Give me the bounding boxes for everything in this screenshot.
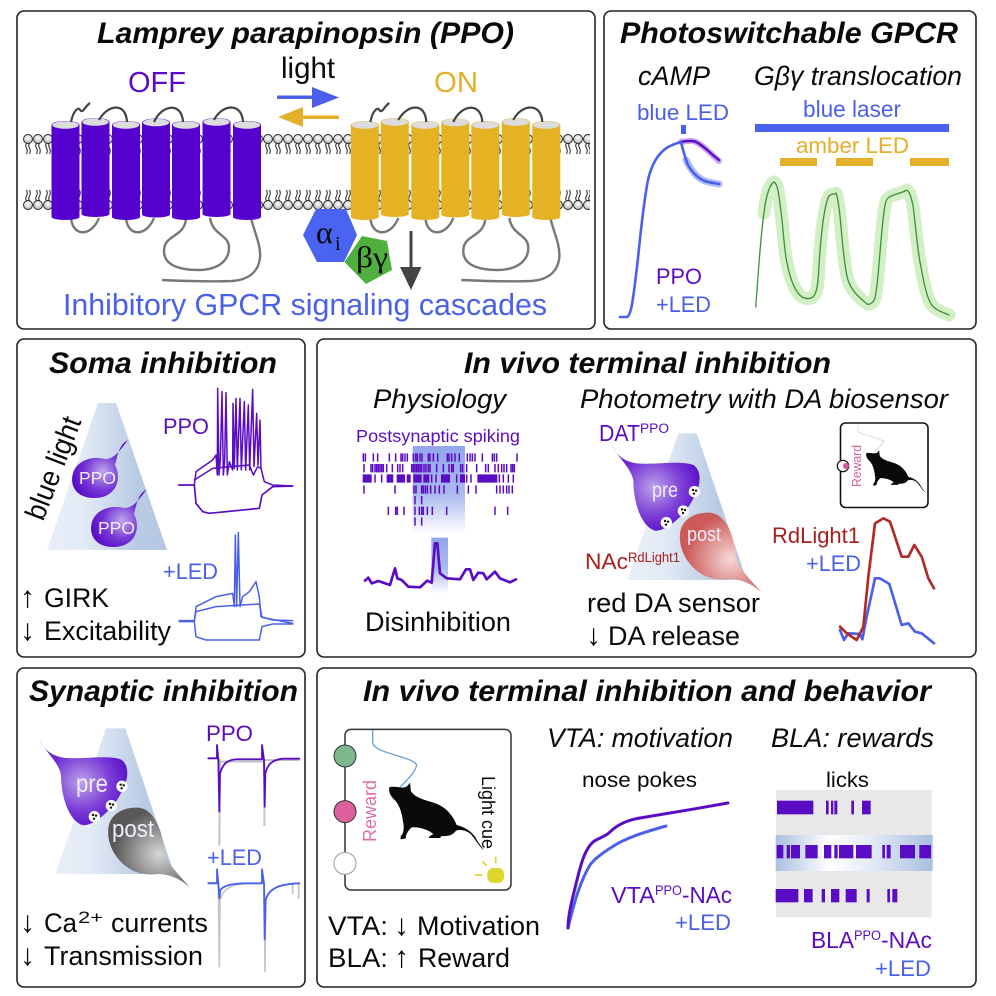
label: blue laser: blue laser: [803, 96, 901, 122]
label: VTA PPO-NAc: PPO: [655, 883, 682, 898]
label: +LED nose pokes: +LED: [675, 910, 731, 935]
neuron: PPO upper: [72, 440, 128, 498]
label: NAc RdLight1: RdLight1: [628, 550, 680, 565]
diagram: synapse: [39, 728, 190, 888]
text: down Excitability: ↓: [20, 614, 35, 647]
line chart: photometry: [840, 518, 934, 643]
stimulus bar: blue laser: [755, 124, 949, 132]
heading: Synaptic inhibition: Synaptic inhibition: [29, 675, 298, 708]
icon: mouse in behaviour box: Reward: [850, 445, 864, 487]
text: down DA release: ↓: [586, 619, 601, 652]
label: blue light: blue light: [20, 412, 88, 525]
subheading: VTA motivation: VTA: motivation: [547, 723, 733, 753]
label: DAT PPO: PPO: [640, 421, 669, 436]
text: VTA down Motivation: ↓: [394, 909, 409, 942]
label: +LED licks: +LED: [875, 956, 931, 981]
neuron: PPO upper: PPO: [79, 468, 116, 488]
label: OFF state: OFF: [128, 67, 186, 99]
arrow: blue forward: [277, 87, 339, 108]
text: down Ca2+ currents: currents: [111, 908, 208, 938]
label: light: light: [281, 52, 335, 85]
text: BLA up Reward: Reward: [418, 943, 510, 973]
label: licks: licks: [826, 769, 869, 792]
icon: G alpha i subunit: i: [335, 233, 341, 255]
text: up GIRK: GIRK: [44, 583, 109, 613]
diagram: behaviour box: Reward: [360, 780, 380, 842]
line chart: G beta gamma translocation: [756, 182, 949, 315]
label: NAc RdLight1: NAc: [585, 549, 628, 574]
text: down Excitability: Excitability: [44, 616, 171, 646]
subheading: Photometry with DA biosensor: Photometry with DA biosensor: [580, 384, 949, 414]
membrane lipid bilayer: [23, 133, 590, 212]
arrow: signaling down: [400, 231, 422, 290]
diagram: DA synapse: [612, 433, 762, 593]
stimulus bar: blue LED: [681, 125, 686, 134]
arrow: amber reverse: [278, 107, 339, 127]
heading: In vivo terminal inhibition and behavior: In vivo terminal inhibition and behavior: [363, 675, 933, 708]
stimulus bars: amber LED: [780, 158, 949, 166]
label: +LED photometry: +LED: [806, 551, 861, 576]
label: BLA PPO-NAc: -NAc: [881, 927, 932, 953]
current traces: +LED: [208, 869, 299, 972]
label: pre: pre: [76, 770, 108, 798]
diagram: behaviour box: [334, 729, 511, 890]
caption: inhibitory cascades: Inhibitory GPCR signaling cascades: [63, 289, 547, 322]
text: BLA up Reward: ↑: [394, 941, 409, 974]
label: nose pokes: nose pokes: [582, 769, 697, 792]
label: ON state: ON: [434, 67, 478, 99]
panel: Lamprey parapinopsin: [17, 11, 595, 329]
label: +LED: +LED: [656, 292, 711, 317]
icon: mouse in behaviour box: [837, 423, 928, 508]
label: BLA PPO-NAc: BLA: [811, 927, 855, 953]
text: down Transmission: Transmission: [44, 941, 203, 971]
label: post: post: [687, 524, 721, 546]
receptor: PPO ON state: [351, 103, 560, 281]
text: down Ca2+ currents: ↓: [20, 906, 35, 939]
line chart: cAMP: [620, 141, 719, 317]
label: Disinhibition: Disinhibition: [365, 607, 511, 637]
label: PPO: PPO: [656, 264, 702, 289]
subheading: cAMP: cAMP: [638, 61, 710, 91]
light cone: [47, 403, 167, 550]
icon: G alpha i subunit: α: [316, 214, 333, 250]
icon: G beta gamma subunit: [344, 236, 392, 284]
label: post: post: [112, 816, 154, 843]
text: down Ca2+ currents: 2+: [78, 908, 103, 927]
text: down DA release: DA release: [608, 621, 740, 651]
label: RdLight1: RdLight1: [772, 523, 860, 548]
heading: Lamprey parapinopsin (PPO): Lamprey parapinopsin (PPO): [97, 17, 514, 50]
raster plot: licks: [776, 790, 933, 917]
label: PPO traces: PPO: [206, 721, 253, 746]
label: PPO trace: PPO: [163, 414, 209, 439]
panel: In vivo terminal inhibition: [317, 339, 976, 657]
label: amber LED: amber LED: [796, 133, 909, 158]
text: red DA sensor: red DA sensor: [587, 588, 760, 618]
label: DAT PPO: DAT: [599, 420, 640, 446]
label: VTA PPO-NAc: VTA: [611, 882, 656, 908]
icon: G beta gamma subunit: βγ: [356, 241, 388, 274]
panel: Synaptic inhibition: [17, 668, 305, 987]
label: +LED traces: +LED: [207, 845, 262, 870]
panel: Soma inhibition: [17, 339, 305, 657]
line chart: nose pokes: [568, 803, 728, 928]
panel: Photoswitchable GPCR: [604, 11, 976, 329]
text: BLA up Reward: BLA:: [328, 943, 388, 973]
label: Postsynaptic spiking: Postsynaptic spiking: [356, 426, 520, 446]
heading: Soma inhibition: Soma inhibition: [49, 347, 277, 380]
label: +LED trace: +LED: [163, 559, 218, 584]
diagram: behaviour box: Light cue: [478, 776, 498, 849]
text: down Transmission: ↓: [20, 939, 35, 972]
subheading: Physiology: Physiology: [373, 384, 508, 414]
heading: In vivo terminal inhibition: In vivo terminal inhibition: [464, 347, 831, 380]
voltage trace: +LED: [179, 533, 293, 640]
line chart: disinhibition trace: [365, 538, 516, 593]
panel: In vivo terminal inhibition and behavior: [317, 668, 976, 987]
label: VTA PPO-NAc: -NAc: [682, 882, 732, 908]
text: VTA down Motivation: Motivation: [417, 911, 540, 941]
current traces: PPO: [208, 745, 299, 845]
label: pre: pre: [652, 479, 678, 502]
text: VTA down Motivation: VTA:: [328, 911, 388, 941]
voltage trace: PPO: [179, 388, 293, 513]
label: BLA PPO-NAc: PPO: [854, 928, 881, 943]
neuron: PPO lower: [91, 489, 147, 547]
icon: G alpha i subunit: [303, 209, 357, 262]
heading: Photoswitchable GPCR: Photoswitchable GPCR: [620, 17, 958, 50]
subheading: BLA rewards: BLA: rewards: [771, 723, 934, 753]
neuron: PPO lower: PPO: [98, 518, 135, 538]
raster plot: spiking: [363, 446, 517, 533]
text: up GIRK: ↑: [20, 581, 35, 614]
receptor: PPO OFF state: [52, 103, 261, 281]
text: down Ca2+ currents: Ca: [44, 908, 78, 938]
label: blue LED: blue LED: [637, 100, 729, 125]
subheading: G beta gamma translocation: Gβγ translocation: [754, 61, 962, 91]
